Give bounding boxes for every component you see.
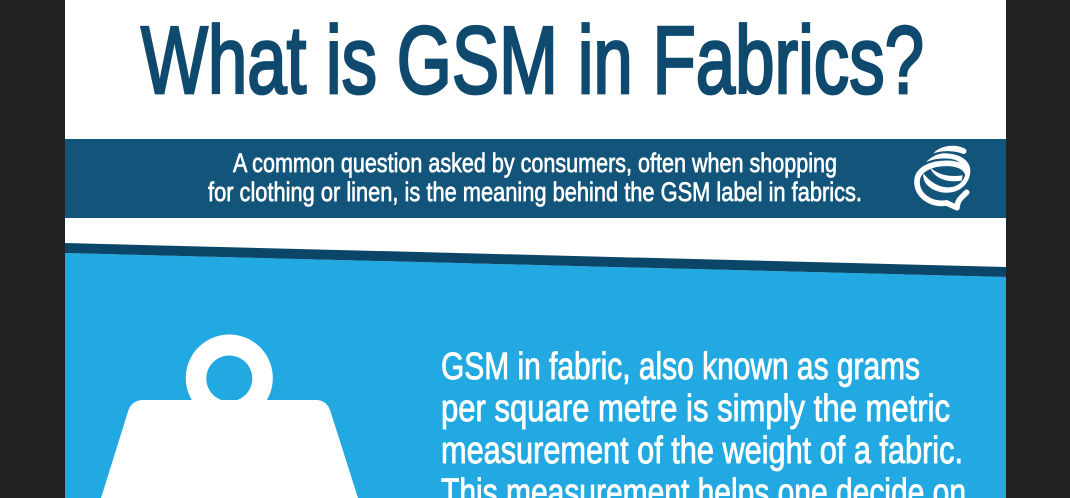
body text: GSM in fabric, also known as grams — [441, 346, 920, 388]
body text: measurement of the weight of a fabric. — [441, 430, 963, 472]
intro text: for clothing or linen, is the meaning behind the GSM label in fabrics. — [208, 177, 862, 207]
icon: weight — [101, 334, 358, 498]
panel: blue content area — [65, 243, 1006, 498]
body text: per square metre is simply the metric — [441, 388, 950, 430]
intro text: A common question asked by consumers, often when shopping — [233, 148, 837, 178]
icon: speech bubble swirl logo — [917, 146, 970, 208]
panel: intro band — [65, 139, 1006, 218]
intro text — [208, 148, 862, 207]
body text — [441, 346, 966, 498]
slanted dark stripe — [65, 243, 1006, 277]
